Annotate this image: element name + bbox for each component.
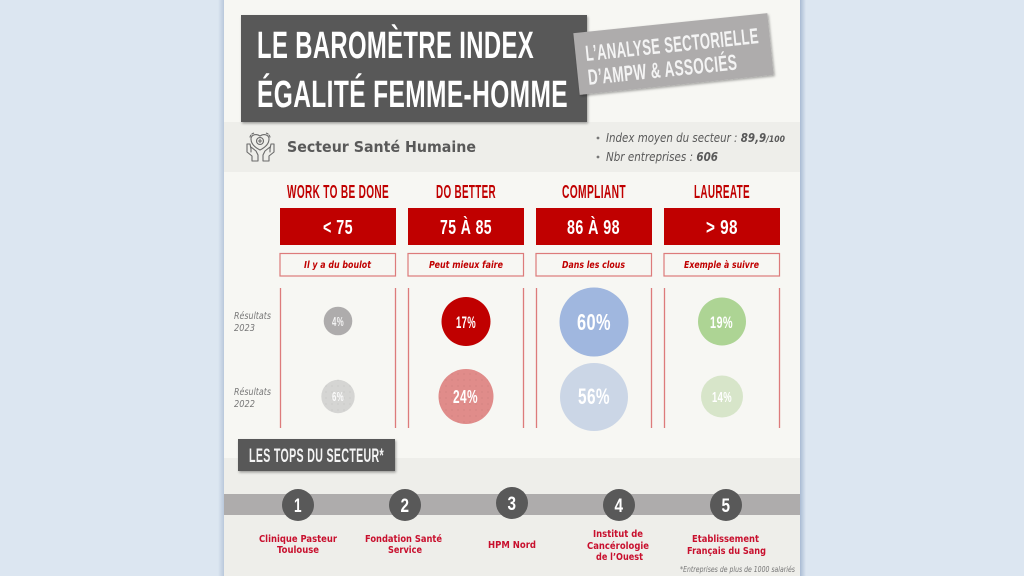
row labels: Résultats	[234, 311, 271, 322]
bubble chart: results 2023: 17%	[456, 313, 476, 332]
bubble chart: results 2023: 4%	[332, 314, 344, 329]
top company names: Toulouse	[277, 545, 319, 556]
row labels	[234, 311, 271, 410]
column headings: LAUREATE	[694, 182, 750, 202]
bubble chart: results 2022: 6%	[332, 389, 344, 404]
score descriptions: Peut mieux faire	[429, 260, 503, 271]
bubble chart: results 2023: 19%	[710, 313, 733, 332]
sector statistics: Nbr entreprises : 606	[606, 150, 718, 164]
top company names: Service	[388, 545, 422, 556]
top company names	[259, 529, 766, 563]
sector heading: Secteur Santé Humaine	[287, 138, 476, 156]
heading: top companies	[238, 439, 395, 471]
sector statistics	[597, 131, 785, 164]
bubble chart: results 2022: 14%	[712, 389, 732, 406]
timeline bar	[224, 494, 800, 515]
top company names: de l’Ouest	[596, 552, 643, 563]
bubble chart: results 2023	[324, 288, 746, 356]
bubble chart: results 2022: 56%	[578, 384, 610, 409]
top company names: Fondation Santé	[365, 534, 442, 545]
column headings: COMPLIANT	[562, 182, 626, 202]
row labels: Résultats	[234, 387, 271, 398]
title	[241, 15, 587, 122]
top company names: Cancérologie	[587, 541, 649, 552]
score descriptions: Il y a du boulot	[304, 260, 371, 271]
ranking markers: 3	[508, 494, 516, 515]
ranking markers	[282, 487, 742, 521]
score ranges: 86 À 98	[567, 216, 620, 239]
column headings	[287, 182, 750, 202]
row labels: 2023	[234, 323, 255, 334]
column headings: DO BETTER	[436, 182, 496, 202]
score ranges: > 98	[706, 217, 738, 239]
top company names: HPM Nord	[488, 540, 536, 551]
top company names: Institut de	[593, 529, 643, 540]
score ranges	[280, 208, 780, 245]
icon: hands holding heart	[247, 133, 274, 161]
ranking markers: 1	[294, 496, 302, 517]
top company names: Français du Sang	[687, 546, 766, 557]
subtitle tag	[573, 13, 774, 95]
footnote: *Entreprises de plus de 1000 salariés	[680, 565, 795, 574]
bubble chart: results 2022	[321, 363, 743, 431]
subtitle tag: D’AMPW & ASSOCIÉS	[587, 50, 738, 90]
column headings: WORK TO BE DONE	[287, 182, 389, 202]
ranking markers: 2	[400, 496, 410, 517]
sector statistics: Index moyen du secteur : 89,9/100	[606, 131, 785, 145]
bubble chart: results 2022: 24%	[453, 387, 478, 407]
row labels: 2022	[234, 399, 255, 410]
top company names: Clinique Pasteur	[259, 534, 337, 545]
score descriptions	[280, 254, 780, 276]
score ranges: 75 À 85	[440, 216, 492, 239]
bubble chart: results 2023: 60%	[577, 309, 611, 335]
heading: top companies: LES TOPS DU SECTEUR*	[249, 446, 384, 467]
score descriptions: Dans les clous	[562, 260, 625, 271]
title: LE BAROMÈTRE INDEX	[257, 23, 534, 67]
column separators	[280, 288, 780, 428]
ranking markers: 5	[722, 496, 730, 517]
subtitle tag: L’ANALYSE SECTORIELLE	[584, 23, 760, 66]
top company names: Etablissement	[692, 534, 759, 545]
ranking markers: 4	[614, 496, 624, 517]
score descriptions: Exemple à suivre	[684, 260, 759, 271]
title: ÉGALITÉ FEMME-HOMME	[257, 72, 568, 116]
score ranges: < 75	[323, 217, 353, 239]
